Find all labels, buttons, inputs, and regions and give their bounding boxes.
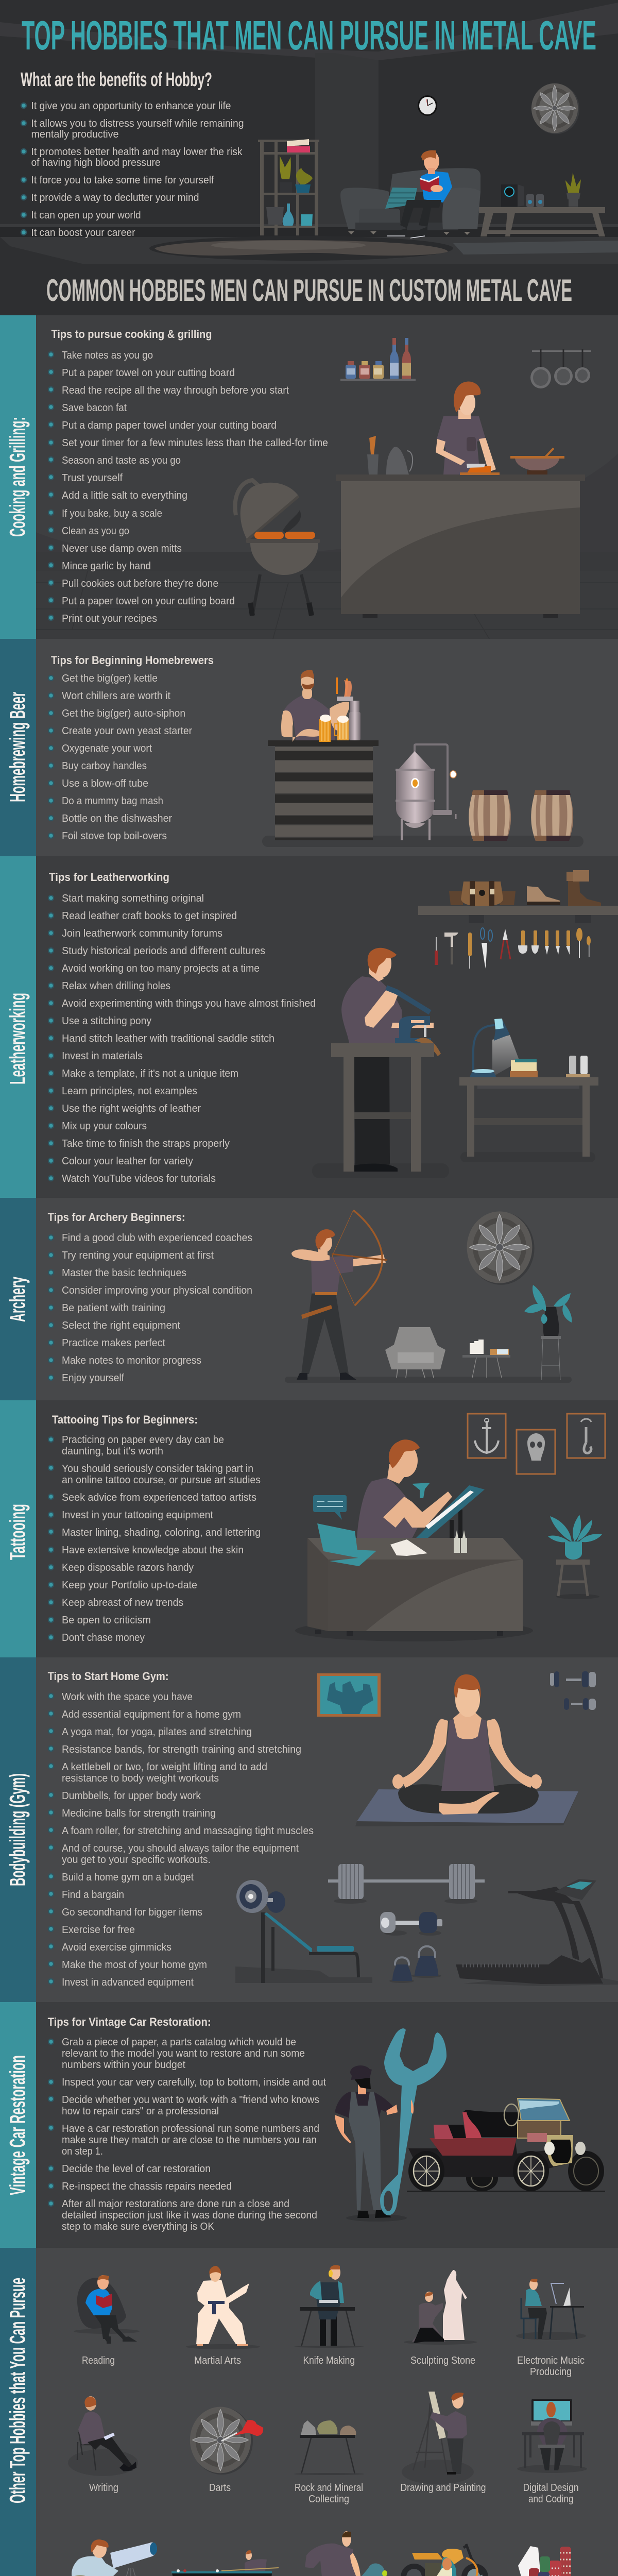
list: tattooing tips: Keep disposable razors handy	[62, 1562, 194, 1573]
list: tattooing tips	[48, 1434, 261, 1643]
label: electronic music producing	[517, 2354, 585, 2378]
list: tattooing tips: Seek advice from experienced tattoo artists	[62, 1492, 256, 1503]
list: leatherworking tips: Read leather craft books to get inspired	[62, 910, 237, 922]
heading: vintage car tips: Tips for Vintage Car Restoration:	[48, 2015, 211, 2028]
coffee table with speakers and plant	[479, 172, 605, 236]
list: homebrew tips: Buy carboy handles	[62, 760, 147, 772]
hobby: rock and mineral	[294, 2420, 364, 2475]
list: vintage car tips: on step 1.	[62, 2145, 103, 2157]
heading: tattooing tips: Tattooing Tips for Beginners:	[52, 1413, 198, 1426]
list: tattooing tips: You should seriously consider taking part in	[62, 1463, 253, 1475]
dumbbells on wall	[550, 1671, 596, 1710]
heading: cooking tips: Tips to pursue cooking & grilling	[52, 328, 212, 341]
beer mugs	[319, 715, 349, 742]
label: darts: Darts	[209, 2482, 231, 2494]
desk	[307, 1523, 523, 1636]
label: digital design: and Coding	[528, 2493, 574, 2505]
panel: cooking and grilling	[0, 315, 618, 639]
pot, kettle and wok	[367, 436, 564, 474]
weight bench	[235, 1880, 372, 1983]
heading: homebrew tips: Tips for Beginning Homebrewers	[51, 654, 214, 667]
label: writing: Writing	[89, 2482, 118, 2494]
list: vintage car tips: Re-inspect the chassis repairs needed	[62, 2180, 232, 2192]
kitchen counter	[336, 474, 585, 618]
list: archery tips	[48, 1232, 252, 1384]
list: archery tips: Find a good club with experienced coaches	[62, 1232, 252, 1244]
panel: vintage car restoration	[0, 2002, 618, 2248]
sidebar: vintage car label	[0, 2002, 36, 2248]
list: homebrew tips: Use a blow-off tube	[62, 777, 148, 789]
list: gym tips	[48, 1691, 314, 1988]
list: gym tips: Add essential equipment for a home gym	[62, 1708, 241, 1720]
hobby: writing	[68, 2396, 138, 2476]
sidebar: other hobbies label	[0, 2248, 36, 2576]
list: homebrew tips: Create your own yeast starter	[62, 725, 192, 737]
list: leatherworking tips: Learn principles, not examples	[62, 1085, 197, 1097]
hobby: knife making	[294, 2265, 364, 2348]
hobby: astronomy	[61, 2539, 157, 2576]
still	[396, 744, 456, 840]
list: vintage car tips: Have a car restoration professional run some numbers and	[62, 2123, 319, 2134]
list: leatherworking tips: Study historical periods and different cultures	[62, 945, 265, 957]
list: homebrew tips: Get the big(ger) kettle	[62, 672, 158, 684]
list: homebrew tips: Get the big(ger) auto-siphon	[62, 707, 185, 719]
dumbbell on floor	[380, 1912, 442, 1936]
hobby: reading	[74, 2275, 140, 2344]
man reading on sofa	[387, 150, 452, 239]
list: vintage car tips: step to make sure everything is OK	[62, 2221, 214, 2232]
heading: leatherworking tips: Tips for Leatherworking	[49, 871, 169, 884]
list: leatherworking tips: Use a stitching pony	[62, 1015, 152, 1027]
list: benefits: It can open up your world	[31, 209, 141, 221]
label: electronic music producing: Electronic Music	[517, 2354, 585, 2366]
hobby: poker and cards	[517, 2546, 575, 2576]
floor pad	[285, 1377, 572, 1383]
list: cooking tips: Clean as you go	[62, 525, 129, 537]
list: cooking tips: Add a little salt to everything	[62, 489, 187, 501]
list: tattooing tips: Have extensive knowledge about the skin	[62, 1544, 244, 1556]
label: electronic music producing: Producing	[530, 2366, 572, 2378]
framed bodybuilder poster	[317, 1673, 381, 1717]
heading: gym tips: Tips to Start Home Gym:	[48, 1670, 169, 1683]
panel: homebrewing beer	[0, 639, 618, 856]
list: gym tips: Work with the space you have	[62, 1691, 193, 1703]
vintage car	[407, 2098, 605, 2192]
label: reading: Reading	[82, 2354, 115, 2366]
list: gym tips: Resistance bands, for strength training and stretching	[62, 1743, 301, 1755]
list: archery tips: Make notes to monitor progress	[62, 1354, 201, 1366]
list: vintage car tips	[48, 2036, 326, 2232]
shelf with plants and vases	[258, 139, 319, 235]
sidebar: cooking label: Cooking and Grilling:	[5, 417, 30, 537]
list: gym tips: Go secondhand for bigger items	[62, 1906, 202, 1918]
label: rock and mineral: Rock and Mineral	[295, 2482, 363, 2494]
list: homebrew tips: Do a mummy bag mash	[62, 795, 163, 807]
list: tattooing tips: Invest in your tattooing equipment	[62, 1509, 213, 1521]
panel: tattooing	[0, 1400, 618, 1657]
grill with sausages	[235, 480, 320, 616]
label: digital design	[523, 2482, 579, 2505]
sidebar: bodybuilding label: Bodybuilding (Gym)	[5, 1773, 30, 1886]
hobby: martial arts	[186, 2266, 260, 2349]
list: tattooing tips: Keep abreast of new trends	[62, 1597, 183, 1608]
list: benefits: of having high blood pressure	[31, 157, 161, 168]
list: benefits: It give you an opportunity to enhance your life	[31, 100, 231, 112]
panel: leatherworking	[0, 856, 618, 1198]
list: homebrew tips: Foil stove top boil-overs	[62, 830, 167, 842]
list: tattooing tips: an online tattoo course, or pursue art studies	[62, 1474, 261, 1486]
list: leatherworking tips: Mix up your colours	[62, 1120, 147, 1132]
list: benefits: It can boost your career	[31, 227, 135, 239]
sidebar: archery label: Archery	[5, 1277, 30, 1322]
icon: dart board wall decoration	[531, 83, 579, 134]
list: benefits: mentally productive	[31, 128, 118, 140]
list: leatherworking tips: Relax when drilling holes	[62, 980, 170, 992]
hobby: rebuilding motorcycles	[401, 2544, 491, 2576]
list: gym tips: Find a bargain	[62, 1889, 124, 1901]
list: gym tips: Invest in advanced equipment	[62, 1976, 194, 1988]
side table with candles and book	[462, 1340, 510, 1378]
list: cooking tips: Season and taste as you go	[62, 454, 181, 466]
speech bubble	[313, 1495, 347, 1520]
label: rock and mineral: Collecting	[308, 2493, 349, 2505]
sidebar: leatherworking label	[0, 856, 36, 1198]
floor shadows	[312, 1152, 595, 1178]
bartender with beer tap	[281, 670, 360, 742]
list: vintage car tips: detailed inspection just like it was done during the second	[62, 2209, 317, 2221]
list: cooking tips: Mince garlic by hand	[62, 560, 151, 572]
list: archery tips: Enjoy yourself	[62, 1372, 124, 1384]
list: tattooing tips: daunting, but it's worth	[62, 1445, 163, 1457]
list: vintage car tips: relevant to the model you want to restore and run some	[62, 2047, 305, 2059]
list: leatherworking tips: Watch YouTube videos for tutorials	[62, 1173, 216, 1184]
list: gym tips: A kettlebell or two, for weight lifting and to add	[62, 1761, 267, 1773]
list: leatherworking tips: Join leatherwork community forums	[62, 927, 222, 939]
list: gym tips: A yoga mat, for yoga, pilates and stretching	[62, 1726, 252, 1738]
list: vintage car tips: Decide the level of car restoration	[62, 2163, 211, 2175]
sidebar: cooking label	[0, 315, 36, 639]
list: leatherworking tips: Avoid experimenting with things you have almost finished	[62, 997, 316, 1009]
list: gym tips: Exercise for free	[62, 1924, 135, 1936]
panel: bodybuilding	[0, 1657, 618, 2002]
yoga mat	[355, 1789, 578, 1826]
list: gym tips: And of course, you should always tailor the equipment	[62, 1842, 299, 1854]
panel: other top hobbies	[0, 2248, 618, 2576]
list: tattooing tips: Master lining, shading, coloring, and lettering	[62, 1527, 261, 1538]
list: tattooing tips: Don't chase money	[62, 1632, 145, 1643]
hobby: darts	[190, 2407, 263, 2475]
list: benefits	[21, 100, 244, 239]
hobby: sculpting stone	[404, 2270, 477, 2345]
kettlebells	[389, 1946, 441, 1983]
spice shelf with bottles	[340, 338, 416, 381]
list: gym tips: resistance to body weight workouts	[62, 1772, 219, 1784]
list: cooking tips: Put a paper towel on your cutting board	[62, 595, 235, 607]
sidebar: vintage car label: Vintage Car Restoration	[5, 2055, 30, 2195]
mechanic with giant wrench	[335, 2028, 447, 2222]
list: vintage car tips: how to repair cars" or a professional	[62, 2105, 219, 2117]
heading: benefits of hobby: What are the benefits of Hobby?	[21, 69, 212, 91]
list: archery tips: Try renting your equipment at first	[62, 1249, 214, 1261]
list: cooking tips: Put a damp paper towel under your cutting board	[62, 419, 277, 431]
list: leatherworking tips	[48, 892, 316, 1184]
label: martial arts: Martial Arts	[194, 2354, 241, 2366]
icon: wall clock	[418, 95, 437, 116]
list: leatherworking tips: Start making something original	[62, 892, 204, 904]
barrels	[469, 790, 573, 841]
list: gym tips: Avoid exercise gimmicks	[62, 1941, 171, 1953]
man cooking	[436, 382, 500, 475]
sofa	[340, 168, 480, 235]
list: vintage car tips: After all major restorations are done run a close and	[62, 2198, 289, 2210]
hobby: fantasy sports	[302, 2531, 387, 2576]
potted plant on stand	[524, 1285, 572, 1380]
rug	[149, 236, 453, 261]
list: cooking tips: Never use damp oven mitts	[62, 543, 182, 554]
hobby: drawing and painting	[402, 2392, 474, 2484]
list: gym tips: Make the most of your home gym	[62, 1959, 207, 1971]
list: benefits: It promotes better health and may lower the risk	[31, 146, 243, 158]
sidebar: homebrewing label	[0, 639, 36, 856]
list: homebrew tips	[48, 672, 192, 842]
list: cooking tips	[48, 349, 328, 624]
list: benefits: It allows you to distress yourself while remaining	[31, 117, 244, 129]
list: homebrew tips: Wort chillers are worth it	[62, 690, 170, 702]
list: archery tips: Master the basic techniques	[62, 1267, 186, 1279]
drawing board	[416, 1485, 485, 1538]
list: cooking tips: Trust yourself	[62, 472, 123, 484]
tool rack	[435, 928, 591, 969]
list: benefits: It force you to take some time for yourself	[31, 174, 214, 186]
icon: dart board	[467, 1211, 535, 1285]
list: gym tips: A foam roller, for stretching and massaging tight muscles	[62, 1825, 314, 1837]
label: rock and mineral	[295, 2482, 363, 2505]
list: leatherworking tips: Colour your leather for variety	[62, 1155, 194, 1167]
heading: archery tips: Tips for Archery Beginners:	[48, 1211, 185, 1224]
desk shadow	[295, 1620, 533, 1641]
hobby: billiards	[171, 2550, 279, 2576]
label: knife making: Knife Making	[303, 2354, 355, 2366]
list: cooking tips: Put a paper towel on your cutting board	[62, 367, 235, 379]
sidebar: leatherworking label: Leatherworking	[5, 993, 30, 1084]
list: leatherworking tips: Avoid working on too many projects at a time	[62, 962, 260, 974]
panel: header room scene	[0, 0, 618, 315]
framed tattoo art	[468, 1414, 605, 1474]
potted plant on stool	[548, 1515, 602, 1599]
list: leatherworking tips: Hand stitch leather with traditional saddle stitch	[62, 1032, 274, 1044]
list: tattooing tips: Keep your Portfolio up-to-date	[62, 1579, 197, 1591]
list: cooking tips: Pull cookies out before they're done	[62, 578, 218, 589]
workbench	[331, 1043, 434, 1172]
list: cooking tips: If you bake, buy a scale	[62, 507, 162, 519]
armchair	[385, 1327, 445, 1378]
list: archery tips: Consider improving your physical condition	[62, 1284, 252, 1296]
list: archery tips: Be patient with training	[62, 1302, 165, 1314]
wall shelf with bag and boots	[418, 870, 618, 923]
list: vintage car tips: Inspect your car very carefully, top to bottom, inside and out	[62, 2076, 326, 2088]
list: leatherworking tips: Invest in materials	[62, 1050, 143, 1062]
side table with lamp, books and thread	[459, 1019, 598, 1157]
hanging pans	[530, 349, 591, 388]
list: cooking tips: Set your timer for a few minutes less than the called-for time	[62, 437, 328, 449]
bar counter	[268, 740, 379, 840]
list: leatherworking tips: Make a template, if it's not a unique item	[62, 1067, 238, 1079]
sidebar: homebrewing label: Homebrewing Beer	[5, 692, 30, 802]
list: cooking tips: Take notes as you go	[62, 349, 153, 361]
list: gym tips: Build a home gym on a budget	[62, 1871, 194, 1883]
list: leatherworking tips: Take time to finish the straps properly	[62, 1138, 230, 1149]
panel: archery	[0, 1198, 618, 1400]
label: sculpting stone: Sculpting Stone	[410, 2354, 475, 2366]
sidebar: other hobbies label: Other Top Hobbies that You Can Pursue	[5, 2278, 30, 2503]
list: cooking tips: Save bacon fat	[62, 402, 127, 414]
sidebar: archery label	[0, 1198, 36, 1400]
leather press	[386, 988, 441, 1056]
list: vintage car tips: Grab a piece of paper, a parts catalog which would be	[62, 2036, 296, 2048]
archer with bow	[291, 1210, 387, 1380]
list: archery tips: Select the right equipment	[62, 1319, 180, 1331]
barbell	[328, 1864, 485, 1904]
label: drawing and painting: Drawing and Painting	[401, 2482, 486, 2494]
list: cooking tips: Print out your recipes	[62, 613, 157, 624]
list: benefits: It provide a way to declutter your mind	[31, 192, 199, 204]
list: homebrew tips: Oxygenate your wort	[62, 742, 152, 754]
list: gym tips: you get to your specific workouts.	[62, 1854, 211, 1866]
man at press	[341, 948, 434, 1172]
floor pad	[262, 836, 583, 847]
sidebar: tattooing label	[0, 1400, 36, 1657]
tattoo artist	[357, 1439, 452, 1538]
list: leatherworking tips: Use the right weights of leather	[62, 1103, 201, 1114]
list: vintage car tips: numbers within your budget	[62, 2059, 185, 2071]
treadmill	[456, 1879, 618, 1986]
hobby: electronic music	[516, 2279, 586, 2340]
list: vintage car tips: Decide whether you want to work with a "friend who knows	[62, 2094, 319, 2106]
list: gym tips: Medicine balls for strength training	[62, 1807, 216, 1819]
list: vintage car tips: make sure they match or are close to the numbers you ran	[62, 2134, 317, 2146]
sidebar: tattooing label: Tattooing	[5, 1504, 30, 1560]
list: gym tips: Dumbbells, for upper body work	[62, 1790, 201, 1802]
list: archery tips: Practice makes perfect	[62, 1337, 165, 1349]
man meditating	[392, 1674, 542, 1815]
hobby: digital design	[517, 2399, 587, 2473]
list: cooking tips: Read the recipe all the way through before you start	[62, 384, 289, 396]
list: tattooing tips: Practicing on paper every day can be	[62, 1434, 224, 1446]
label: digital design: Digital Design	[523, 2482, 579, 2494]
sidebar: bodybuilding label	[0, 1657, 36, 2002]
list: homebrew tips: Bottle on the dishwasher	[62, 812, 172, 824]
pillow	[385, 188, 417, 209]
list: tattooing tips: Be open to criticism	[62, 1614, 151, 1626]
